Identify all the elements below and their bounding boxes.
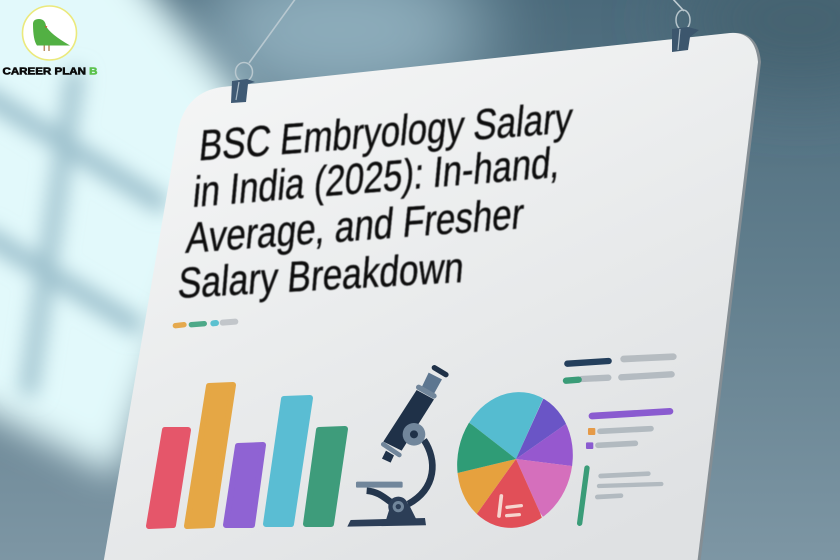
pie chart [457, 392, 573, 528]
legend blocks [566, 357, 673, 523]
hanging white board [103, 33, 758, 560]
title: in India (2025): In-hand, [191, 139, 562, 217]
wire and right clip [672, 0, 699, 52]
board edge [105, 33, 761, 560]
logo badge with bird [22, 6, 76, 60]
bar chart [149, 385, 345, 526]
icon: pie slice glyph [499, 496, 521, 516]
logo: Career Plan B [2, 6, 98, 78]
wire and left clip [231, 0, 296, 103]
title: Average, and Fresher [184, 190, 526, 263]
small colour dash row [175, 322, 235, 326]
title [176, 94, 575, 308]
title: Salary Breakdown [176, 244, 466, 308]
title: BSC Embryology Salary [197, 94, 575, 171]
icon: microscope [347, 368, 446, 527]
logo wordmark: CAREER PLAN B [2, 66, 98, 78]
